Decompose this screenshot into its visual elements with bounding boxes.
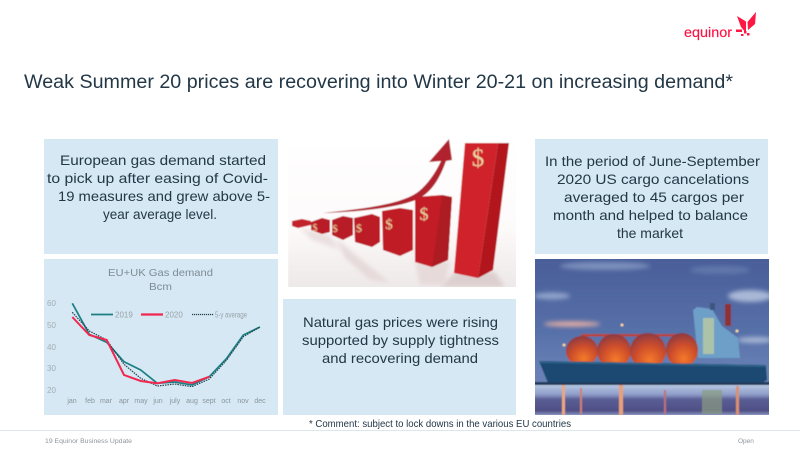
deck lights	[562, 324, 738, 346]
panel text: year average level.	[103, 206, 217, 222]
panel: gas demand chart	[44, 259, 278, 415]
panel: gas prices rising	[283, 299, 516, 415]
panel text	[545, 153, 760, 241]
image: rising bar chart with dollar signs	[288, 136, 518, 289]
dollar signs	[312, 145, 484, 235]
clouds	[534, 262, 773, 343]
growth arrow	[323, 139, 452, 213]
logo: equinor	[684, 12, 756, 40]
y axis labels: 60	[47, 299, 56, 308]
panel text: 19 measures and grew above 5-	[58, 188, 270, 204]
panel text: averaged to 45 cargos per	[564, 189, 744, 205]
panel text	[47, 152, 270, 222]
x axis labels: july	[169, 398, 181, 405]
dollar signs: $	[385, 217, 393, 233]
reflections	[562, 385, 739, 415]
x axis labels: dec	[254, 398, 266, 405]
reflection	[338, 241, 385, 282]
image: LNG tanker at dusk	[533, 257, 773, 417]
deck pipes	[581, 334, 685, 336]
chart title: EU+UK Gas demand	[108, 267, 213, 279]
panel: US cargo cancelations	[535, 139, 768, 254]
x axis labels	[66, 398, 266, 405]
x axis labels: jan	[66, 398, 77, 405]
y axis labels: 20	[47, 386, 56, 395]
panel text: In the period of June-September	[545, 153, 760, 169]
x axis labels: jun	[152, 398, 163, 405]
panel text: supported by supply tightness	[302, 332, 499, 348]
dollar signs: $	[312, 223, 318, 234]
panel text: and recovering demand	[322, 350, 478, 366]
hull	[539, 361, 767, 384]
panel: European gas demand	[44, 139, 278, 254]
legend: 2020	[165, 310, 183, 320]
footnote: * Comment: subject to lock downs in the various EU countries	[309, 418, 571, 430]
legend: 2019	[115, 310, 133, 320]
panel text: the market	[617, 225, 683, 241]
panel text: to pick up after easing of Covid-	[47, 170, 268, 186]
panel text: European gas demand started	[60, 152, 266, 168]
footer right: Open	[738, 438, 754, 445]
x axis labels: nov	[237, 398, 249, 405]
line: 2020	[72, 317, 209, 383]
dollar signs: $	[356, 221, 362, 235]
x axis labels: feb	[85, 398, 95, 405]
water	[533, 385, 771, 417]
logo wordmark: equinor	[684, 25, 733, 40]
line: 2019	[72, 303, 260, 385]
bars	[292, 143, 509, 278]
x axis labels: mar	[100, 398, 113, 405]
footer left: 19 Equinor Business Update	[45, 438, 132, 445]
x axis labels: apr	[119, 398, 130, 405]
x axis labels: oct	[221, 398, 231, 405]
legend: 5-y average	[215, 310, 247, 320]
panel text: 2020 US cargo cancelations	[557, 171, 749, 187]
y axis labels: 40	[47, 343, 56, 352]
x axis labels: may	[134, 398, 148, 405]
x axis labels: sept	[202, 398, 216, 405]
panel text	[302, 314, 499, 366]
title: Weak Summer 20 prices are recovering into Winter 20-21 on increasing demand*	[24, 72, 734, 93]
y axis labels: 30	[47, 364, 56, 373]
x axis labels: aug	[186, 398, 198, 405]
panel text: Natural gas prices were rising	[303, 314, 498, 330]
ship superstructure	[693, 307, 740, 358]
y axis labels	[47, 299, 56, 395]
panel text: month and helped to balance	[553, 207, 748, 223]
legend	[91, 310, 247, 320]
y axis labels: 50	[47, 321, 56, 330]
dollar signs: $	[332, 223, 338, 235]
tanks	[566, 336, 598, 366]
dollar signs: $	[420, 204, 428, 224]
chart title: Bcm	[149, 281, 172, 293]
line: 5-year average	[72, 312, 260, 387]
dollar signs: $	[472, 145, 484, 172]
logo star icon	[736, 12, 756, 36]
chart title	[108, 267, 213, 293]
